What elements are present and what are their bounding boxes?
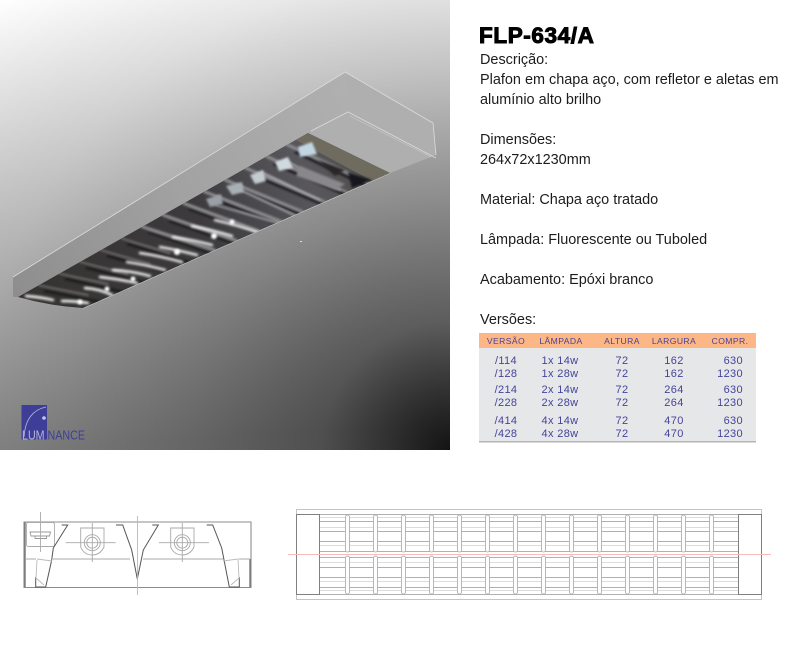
table rows: 630 [724,355,743,367]
table rows: 1230 [717,397,743,409]
description text: alumínio alto brilho [480,92,601,108]
louvre columns [346,515,714,594]
table rows: 1x 14w [542,355,578,367]
technical drawing: top view [288,509,771,600]
table header [487,336,748,346]
versions table [479,333,756,442]
table header: COMPR. [712,336,748,346]
right lamp holder [159,523,209,562]
center axis [288,554,771,556]
reflector opening with louvres [18,133,390,308]
table rows: /414 [495,415,517,427]
description heading: Descrição: [480,52,548,68]
table rows: 470 [664,428,684,440]
chrome reflections [206,142,372,207]
table rows: /114 [495,355,517,367]
table rows [495,355,743,440]
table rows: 2x 14w [542,384,578,396]
versions heading: Versões: [480,312,536,328]
reflector outline [36,525,68,587]
table rows: /228 [495,397,517,409]
table rows: 4x 28w [542,428,578,440]
table rows: /214 [495,384,517,396]
table rows: 162 [664,355,684,367]
housing long side [13,72,348,297]
right end cap [738,514,762,594]
finish: Acabamento: Epóxi branco [480,272,653,288]
table header: LÂMPADA [539,336,583,346]
table rows: 1230 [717,368,743,380]
table rows: 72 [616,368,628,380]
material: Material: Chapa aço tratado [480,192,658,208]
table rows: 1x 28w [542,368,578,380]
table rows: /128 [495,368,517,380]
dimensions: Dimensões: [480,132,556,148]
center axis [136,516,138,595]
table header: LARGURA [652,336,696,346]
speck [300,241,302,242]
table rows: /428 [495,428,517,440]
table rows: 72 [616,384,628,396]
table rows: 630 [724,384,743,396]
table rows: 630 [724,415,743,427]
dimensions: 264x72x1230mm [480,152,591,168]
left lamp holder [66,523,116,562]
housing end face [308,72,436,173]
table rows: 1230 [717,428,743,440]
table header: VERSÃO [487,336,525,346]
louvre highlights [26,220,262,303]
logo: Luminance: LUMINANCE [22,428,85,442]
table rows: 72 [616,428,628,440]
table header: ALTURA [604,336,640,346]
table rows: 72 [616,415,628,427]
title: FLP-634/A [479,23,594,48]
left end cap [296,514,320,594]
luminaire [0,72,436,320]
table rows: 72 [616,397,628,409]
table rows: 162 [664,368,684,380]
horizontal reflector lines [320,514,738,594]
description text [480,72,779,108]
dimensions [480,132,591,168]
description text: Plafon em chapa aço, com refletor e aletas em [480,72,779,88]
logo: Luminance [22,405,85,442]
table rows: 2x 28w [542,397,578,409]
table rows: 72 [616,355,628,367]
left bracket box [26,512,54,552]
table rows: 4x 14w [542,415,578,427]
table rows: 470 [664,415,684,427]
technical drawing: cross section [23,512,252,595]
lamp: Lâmpada: Fluorescente ou Tuboled [480,232,707,248]
table rows: 264 [664,397,684,409]
product photo panel [0,0,450,450]
table rows: 264 [664,384,684,396]
